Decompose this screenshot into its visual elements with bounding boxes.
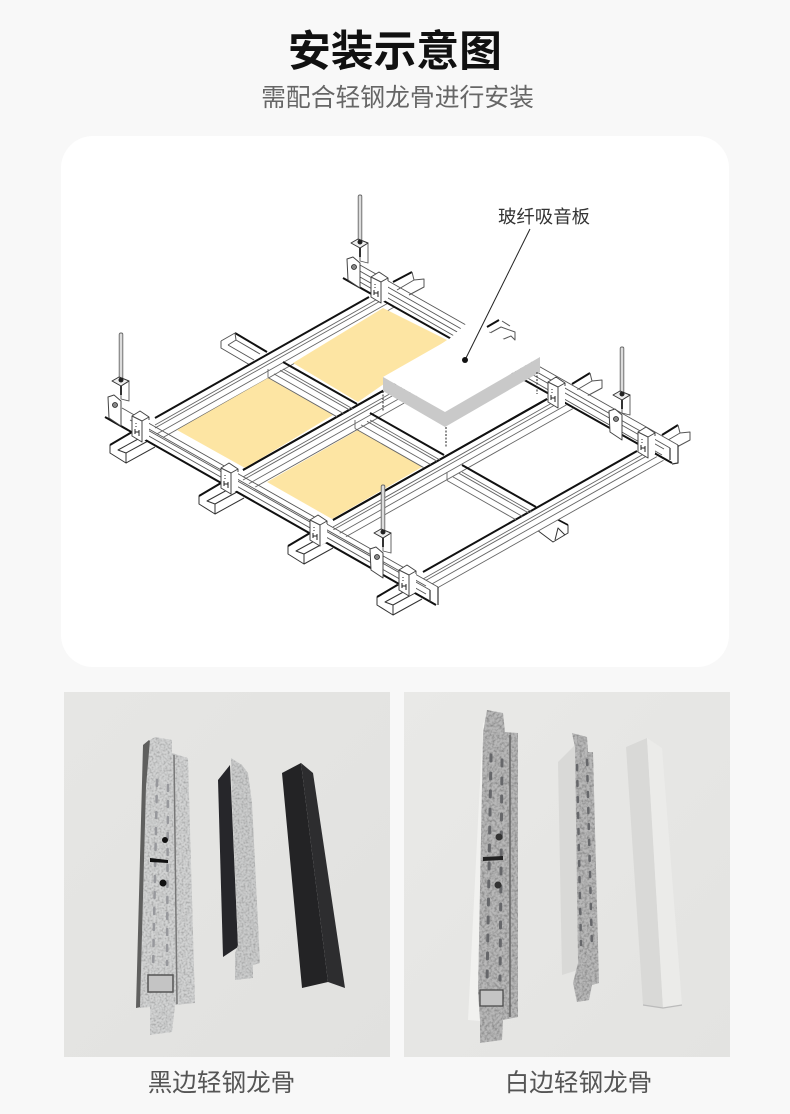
cross bars — [268, 362, 536, 520]
hangers — [108, 195, 630, 578]
photo: white edge keels — [404, 692, 730, 1057]
connector clips — [132, 272, 655, 596]
caption: white edge keel: 白边轻钢龙骨 — [505, 1070, 652, 1097]
long keel — [136, 737, 195, 1035]
caption: black edge keel: 黑边轻钢龙骨 — [148, 1070, 295, 1097]
panel: installation diagram — [61, 136, 729, 667]
subtitle: 需配合轻钢龙骨进行安装 — [261, 85, 534, 112]
photo: black edge keels — [64, 692, 390, 1057]
label: 玻纤吸音板: 玻纤吸音板 — [498, 206, 590, 227]
long keel — [468, 710, 518, 1043]
bar black edges over panels — [243, 349, 547, 520]
T-bar grid — [155, 297, 664, 596]
diagram: suspended ceiling grid — [104, 194, 690, 616]
front main channel — [105, 405, 438, 605]
back main channel — [343, 262, 678, 464]
yellow ceiling panels — [177, 308, 447, 519]
short white keel — [558, 733, 599, 1002]
short black keel — [218, 758, 260, 980]
black angle strip — [282, 763, 345, 988]
carrying channel stubs — [110, 272, 690, 615]
title: 安装示意图 — [288, 28, 502, 76]
white angle strip — [626, 738, 682, 1008]
leader line — [462, 229, 530, 363]
white glass fibre panel — [383, 322, 540, 448]
